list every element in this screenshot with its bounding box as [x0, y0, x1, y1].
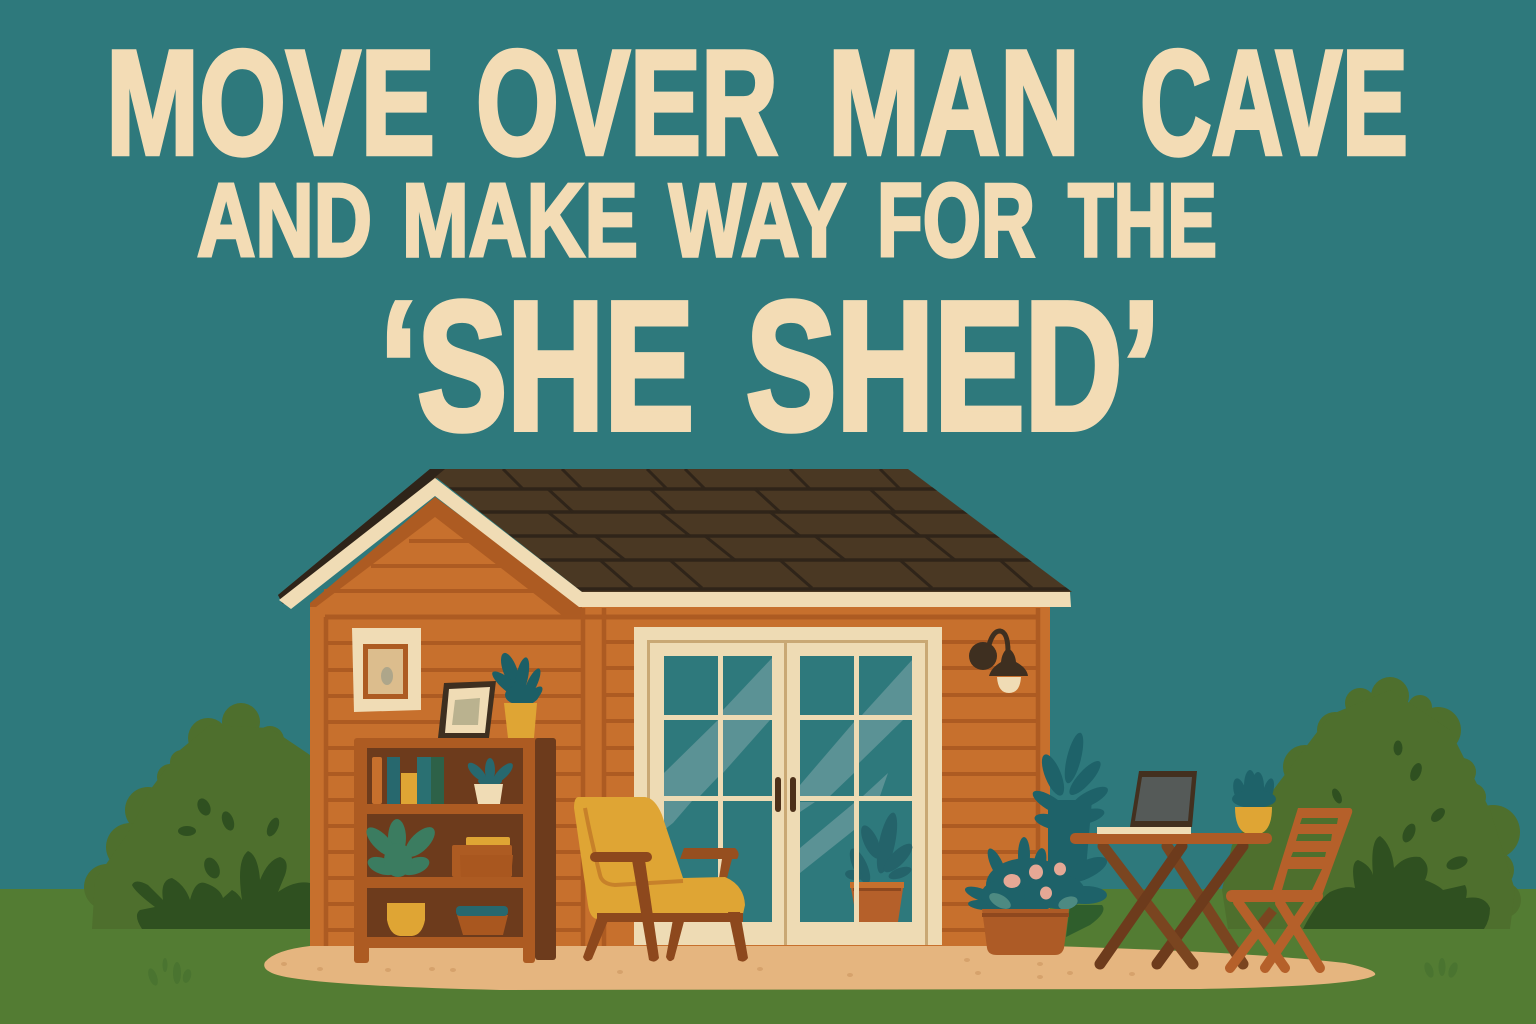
right bush — [1222, 677, 1521, 929]
small white pot plant — [465, 758, 516, 804]
books — [372, 757, 444, 804]
bistro table — [1070, 833, 1272, 964]
potted plant on shelf top — [489, 651, 545, 738]
chair body — [574, 797, 745, 919]
tall plant behind pot — [1029, 731, 1111, 937]
title: WAY — [669, 163, 846, 279]
legs — [583, 852, 748, 962]
title: FOR — [877, 163, 1035, 279]
title: CAVE — [1140, 19, 1408, 186]
plant behind glass — [844, 811, 916, 922]
flower planter — [963, 837, 1085, 955]
title: SHED’ — [746, 263, 1160, 468]
title: THE — [1068, 163, 1217, 279]
left bush — [84, 703, 310, 929]
gable band — [310, 497, 582, 618]
stacked boxes — [452, 837, 513, 877]
laptop — [1097, 771, 1197, 834]
basket — [456, 906, 508, 935]
title: OVER — [476, 19, 778, 186]
title: MOVE — [106, 19, 435, 186]
lawn — [0, 889, 1536, 1024]
title: MAKE — [402, 163, 638, 279]
shed — [278, 469, 1080, 946]
siding lines — [324, 541, 1038, 946]
title: MAN — [828, 19, 1080, 186]
title — [106, 19, 1408, 468]
patio — [264, 946, 1375, 990]
yellow bowl — [387, 903, 425, 936]
grass tufts — [146, 958, 1459, 987]
window reflections — [664, 658, 912, 873]
title: ‘SHE — [380, 263, 694, 468]
green leafy plant — [362, 819, 440, 879]
table potted plant — [1231, 770, 1276, 833]
door handles — [775, 777, 781, 812]
shed walls — [310, 505, 1050, 946]
white roof trim — [279, 478, 1071, 609]
folding chair — [1226, 808, 1352, 968]
french door — [634, 627, 942, 945]
bookshelf — [354, 738, 556, 963]
back arm — [680, 848, 739, 878]
title: AND — [197, 163, 372, 279]
roof — [278, 469, 1080, 604]
framed picture on wall — [352, 628, 421, 712]
wall lamp — [969, 631, 1028, 693]
picture frame on shelf — [438, 681, 496, 738]
armchair — [574, 797, 748, 962]
